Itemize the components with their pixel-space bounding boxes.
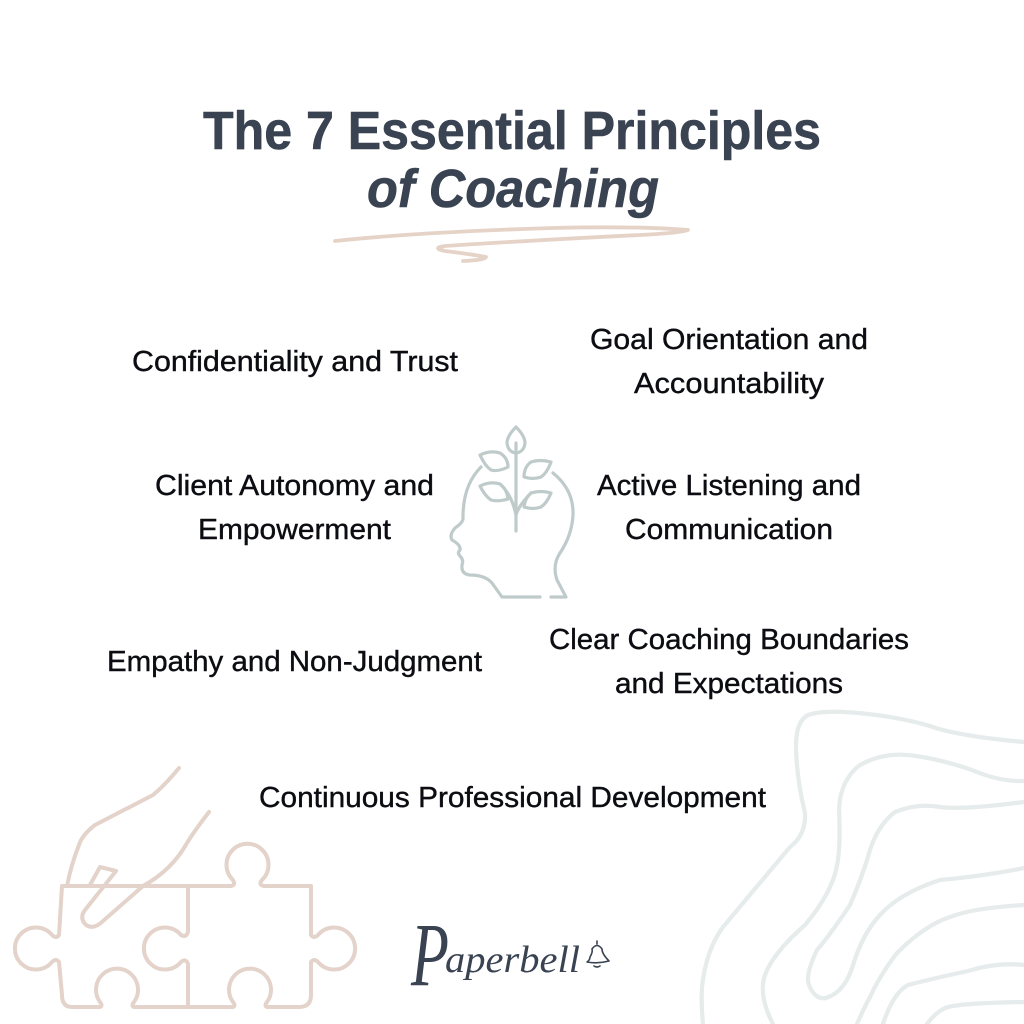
principle: Goal Orientation and Accountability: Goal Orientation and (590, 324, 868, 356)
icon: hand placing puzzle piece (15, 768, 355, 1007)
principle: Clear Coaching Boundaries and Expectations (549, 624, 909, 700)
principle: Confidentiality and Trust: Confidentiality and Trust (132, 346, 458, 378)
logo: Paperbell: aperbell (445, 939, 580, 981)
title: The 7 Essential Principles (203, 101, 821, 161)
icon: bell (587, 941, 609, 967)
title underline swash (335, 227, 688, 261)
principle: Active Listening and Communication: Communication (625, 514, 833, 546)
principle: Client Autonomy and Empowerment: Client Autonomy and (155, 470, 434, 502)
principle: Goal Orientation and Accountability: Accountability (634, 368, 825, 400)
icon: head with growing plant (451, 427, 573, 597)
principle: Client Autonomy and Empowerment (155, 470, 434, 546)
principle: Active Listening and Communication (597, 470, 861, 546)
title: of Coaching (367, 159, 659, 219)
principle: Client Autonomy and Empowerment: Empowerment (198, 514, 391, 546)
principle: Goal Orientation and Accountability (590, 324, 868, 400)
principle: Active Listening and Communication: Active Listening and (597, 470, 861, 502)
logo: Paperbell: P (410, 906, 449, 1005)
puzzle pieces (15, 844, 355, 1007)
principle: Continuous Professional Development: Continuous Professional Development (259, 782, 766, 814)
logo: Paperbell (410, 906, 609, 1005)
hand (67, 768, 209, 927)
decorative contour lines (702, 712, 1024, 1024)
principle: Empathy and Non-Judgment: Empathy and Non-Judgment (107, 646, 482, 678)
principle: Clear Coaching Boundaries and Expectations: Clear Coaching Boundaries (549, 624, 909, 656)
title (203, 101, 821, 219)
principle: Clear Coaching Boundaries and Expectations: and Expectations (615, 668, 843, 700)
